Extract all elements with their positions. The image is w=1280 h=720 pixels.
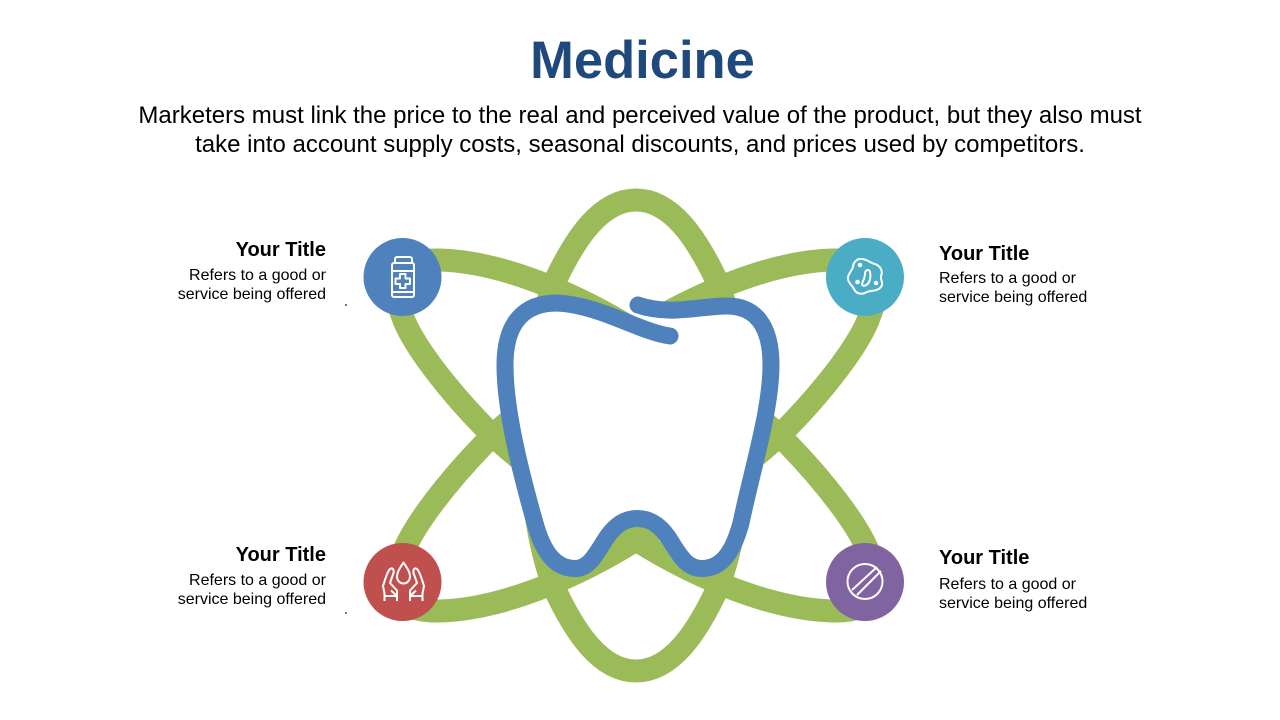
atom orbit: tilted up-right xyxy=(396,260,876,611)
small dot: top left xyxy=(345,304,347,306)
tooth interior xyxy=(505,303,771,568)
description: bottom right: Refers to a good or xyxy=(939,576,1076,593)
label: top left xyxy=(178,239,326,303)
subtitle text xyxy=(138,102,1142,158)
description: bottom right xyxy=(939,576,1087,612)
heading: top right: Your Title xyxy=(939,243,1029,265)
title: Medicine xyxy=(530,31,755,90)
label: bottom left xyxy=(178,544,326,608)
description: top left xyxy=(178,267,326,303)
atom orbit: tilted down-right xyxy=(396,260,876,611)
icon: microbe xyxy=(826,238,904,316)
subtitle text: Marketers must link the price to the real and perceived value of the product, but they also must xyxy=(138,102,1142,129)
subtitle text: take into account supply costs, seasonal discounts, and prices used by competitors. xyxy=(195,131,1085,158)
heading: bottom left: Your Title xyxy=(236,544,326,566)
atom orbit: vertical xyxy=(530,200,742,671)
small dot: bottom left xyxy=(345,612,347,614)
label: bottom right xyxy=(939,547,1087,612)
description: bottom left: Refers to a good or xyxy=(189,572,326,589)
green fill under tooth notch xyxy=(606,520,668,546)
description: bottom left xyxy=(178,572,326,608)
description: top left: Refers to a good or xyxy=(189,267,326,284)
heading: top left: Your Title xyxy=(236,239,326,261)
icon: hands holding drop xyxy=(364,543,442,621)
description: bottom right: service being offered xyxy=(939,595,1087,612)
label: top right xyxy=(939,243,1087,306)
gap between tooth strands xyxy=(628,310,674,334)
icon: pill xyxy=(826,543,904,621)
description: top right: service being offered xyxy=(939,289,1087,306)
description: bottom left: service being offered xyxy=(178,591,326,608)
description: top left: service being offered xyxy=(178,286,326,303)
icon: medicine bottle xyxy=(364,238,442,316)
tooth outline xyxy=(505,303,771,568)
description: top right xyxy=(939,270,1087,306)
description: top right: Refers to a good or xyxy=(939,270,1076,287)
heading: bottom right: Your Title xyxy=(939,547,1029,569)
